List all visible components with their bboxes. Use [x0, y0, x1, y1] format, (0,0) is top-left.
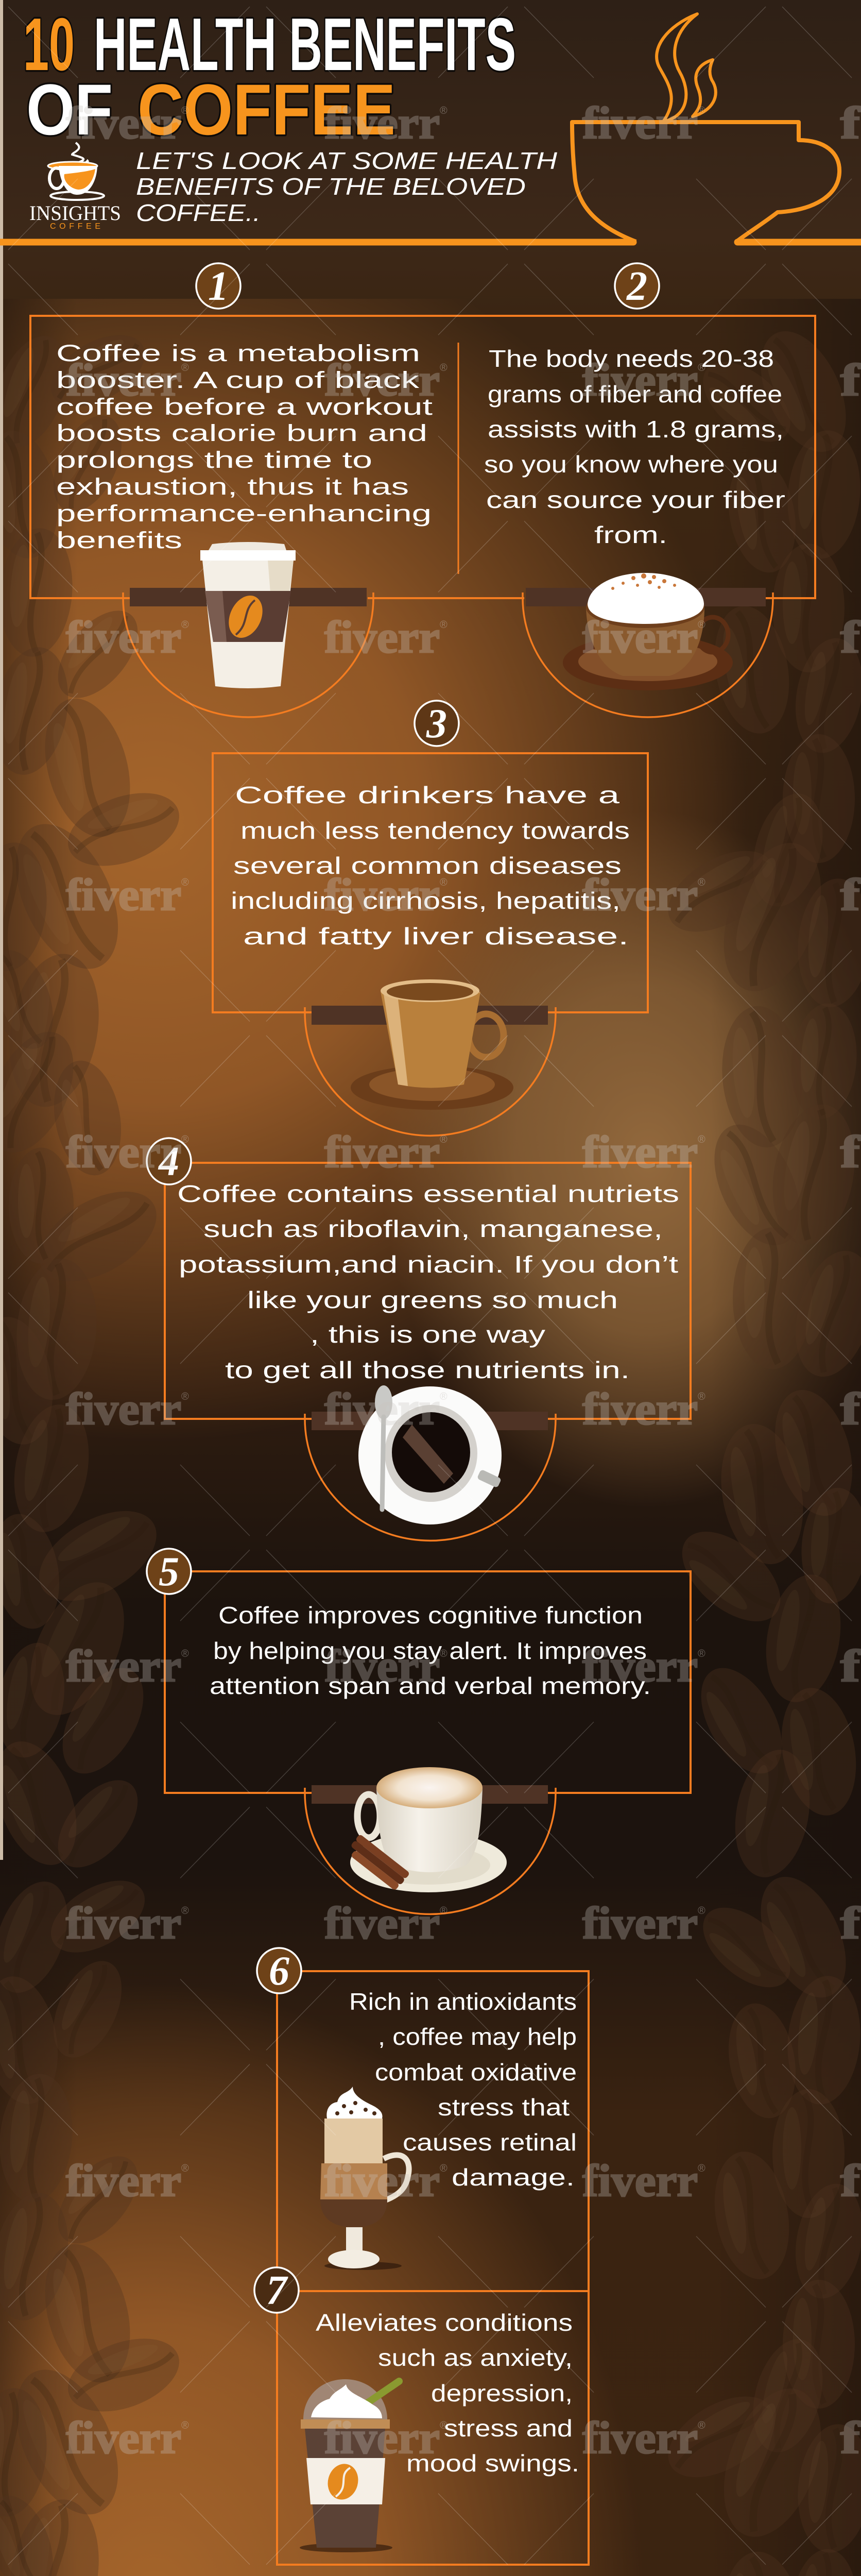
text: benefit 1: coffee before a workout [56, 394, 433, 420]
text: benefit 2: The body needs 20-38 [489, 345, 774, 372]
watermark text: ® [440, 2420, 447, 2431]
text: benefit 7: Alleviates conditions [316, 2309, 573, 2336]
watermark text: ® [181, 1648, 189, 1659]
logo: insights coffee: COFFEE [50, 222, 100, 231]
watermark text: f [840, 1899, 861, 1948]
watermark text: ® [698, 1648, 705, 1659]
logo: insights coffee: INSIGHTS [29, 201, 121, 225]
watermark text: fiverr [582, 1127, 698, 1177]
watermark text: fiverr [324, 1127, 440, 1177]
text: benefit 6: damage. [452, 2164, 575, 2191]
panel frame [165, 1571, 691, 1793]
title line 2: COFFEE [137, 69, 395, 150]
number badge 1: 1 [208, 264, 229, 309]
watermark text: f [840, 1641, 861, 1691]
watermark text: ® [698, 105, 705, 116]
text: benefit 4: , this is one way [310, 1321, 545, 1348]
bowl arc [305, 1788, 556, 1914]
watermark text: f [840, 1384, 861, 1434]
panel: benefit 4 [147, 1138, 691, 1540]
text: benefit 3 [231, 782, 630, 950]
text: benefit 2: grams of fiber and coffee [488, 381, 782, 408]
text: benefit 2: can source your fiber [486, 486, 785, 513]
watermark text: fiverr [582, 2413, 698, 2463]
subtitle [136, 147, 558, 226]
text: benefit 6: Rich in antioxidants [349, 1988, 577, 2015]
number badge 7 [254, 2267, 299, 2313]
band 2 [526, 588, 766, 606]
panel frame [277, 1971, 589, 2291]
watermark text: ® [698, 1391, 705, 1402]
logo: insights coffee [29, 143, 121, 231]
watermark text: ® [181, 362, 189, 374]
panel: benefit 6 [257, 1948, 589, 2291]
number badge 7: 7 [266, 2268, 288, 2313]
bowl arc 1 [123, 592, 373, 717]
watermark text: ® [440, 619, 447, 631]
text: benefit 1: boosts calorie burn and [56, 420, 427, 446]
watermark text: ® [440, 1648, 447, 1659]
watermark text: fiverr [66, 355, 181, 405]
icon: foam cup with cinnamon [346, 1767, 507, 1892]
text: benefit 7: such as anxiety, [378, 2344, 573, 2371]
watermark text: ® [181, 877, 189, 888]
watermark text: ® [698, 1905, 705, 1917]
number badge 3 [415, 701, 459, 747]
text: benefit 1: exhaustion, thus it has [56, 473, 409, 500]
text: benefit 1: Coffee is a metabolism [56, 340, 420, 366]
band [312, 1006, 548, 1025]
watermark text: fiverr [66, 2413, 181, 2463]
number badge 6 [257, 1948, 301, 1994]
watermark text: ® [698, 2420, 705, 2431]
watermark text: fiverr [324, 1384, 440, 1434]
watermark text: ® [181, 619, 189, 631]
text: benefit 7: depression, [431, 2380, 573, 2406]
watermark text: fiverr [66, 870, 181, 920]
watermark text: ® [698, 877, 705, 888]
watermark text: f [840, 1127, 861, 1177]
watermark text: fiverr [66, 1641, 181, 1691]
watermark text: fiverr [66, 2156, 181, 2206]
watermark text: fiverr [582, 1641, 698, 1691]
text: benefit 1 [56, 340, 433, 553]
watermark text: f [840, 2413, 861, 2463]
watermark text: ® [181, 105, 189, 116]
watermark text: ® [440, 1905, 447, 1917]
watermark text: fiverr [66, 1899, 181, 1948]
text: benefit 3: Coffee drinkers have a [235, 782, 620, 808]
text: benefit 7: stress and [444, 2415, 573, 2442]
bowl arc [305, 1414, 556, 1540]
icon: top-view coffee [358, 1385, 502, 1524]
text: benefit 5 [210, 1602, 651, 1699]
text: benefit 3: and fatty liver disease. [243, 923, 629, 950]
watermark text: f [840, 870, 861, 920]
panel frame [277, 2291, 589, 2565]
subtitle: BENEFITS OF THE BELOVED [136, 173, 526, 200]
number badge 3: 3 [426, 701, 447, 747]
watermark text: fiverr [66, 1127, 181, 1177]
watermark text: f [840, 98, 861, 148]
text: benefit 2: assists with 1.8 grams, [488, 416, 784, 443]
watermark text: fiverr [324, 2156, 440, 2206]
number badge 2 [615, 263, 659, 309]
header [0, 3, 861, 242]
watermark text: fiverr [66, 613, 181, 663]
text: benefit 6 [349, 1988, 577, 2191]
title line 2: OF [26, 69, 113, 150]
watermark text: ® [698, 1134, 705, 1145]
band [312, 1785, 548, 1804]
text: benefit 4: to get all those nutrients in. [225, 1357, 630, 1383]
icon: iced coffee cup [300, 2379, 399, 2552]
title line 1: HEALTH BENEFITS [94, 3, 516, 86]
icon: takeaway cup [200, 542, 296, 688]
panel frame [213, 753, 648, 1012]
watermark text: fiverr [324, 355, 440, 405]
text: benefit 3: including cirrhosis, hepatitis, [231, 887, 621, 914]
text: benefit 2: so you know where you [484, 451, 778, 478]
watermark text: ® [440, 1134, 447, 1145]
text: benefit 3: several common diseases [233, 852, 622, 879]
panel frame [165, 1163, 691, 1419]
text: benefit 2 [484, 345, 785, 548]
watermark text: ® [440, 1391, 447, 1402]
number badge 4 [147, 1138, 191, 1184]
watermark text: ® [181, 2420, 189, 2431]
number badge 5 [147, 1549, 191, 1595]
watermark text: fiverr [324, 870, 440, 920]
watermark text: fiverr [582, 98, 698, 148]
watermark text: fiverr [582, 355, 698, 405]
text: benefit 4: such as riboflavin, manganese, [203, 1215, 663, 1242]
watermark text: ® [181, 1391, 189, 1402]
text: benefit 4: potassium,and niacin. If you don’t [179, 1251, 678, 1278]
text: benefit 5: Coffee improves cognitive function [218, 1602, 643, 1629]
watermark text: ® [181, 2163, 189, 2174]
panel: benefit 5 [147, 1549, 691, 1914]
watermark text: fiverr [324, 1899, 440, 1948]
text: benefit 5: attention span and verbal memory. [210, 1672, 651, 1699]
text: benefit 3: much less tendency towards [240, 817, 630, 844]
panel: benefit 3 [213, 701, 648, 1136]
subtitle: LET'S LOOK AT SOME HEALTH [136, 147, 558, 174]
header rule [0, 239, 861, 245]
number badge 2: 2 [626, 264, 647, 309]
band [312, 1412, 548, 1430]
panel: benefit 7 [254, 2267, 589, 2565]
watermark text: fiverr [324, 2413, 440, 2463]
watermark text: ® [440, 2163, 447, 2174]
number badge 5: 5 [159, 1549, 179, 1595]
text: benefit 4 [177, 1180, 679, 1383]
icon: cappuccino [563, 573, 733, 690]
watermark text: fiverr [582, 1384, 698, 1434]
title line 1 [23, 3, 516, 86]
watermark text: ® [698, 362, 705, 374]
divider [457, 343, 459, 574]
bowl arc [305, 1007, 556, 1136]
text: benefit 2: from. [594, 521, 667, 548]
watermark text: fiverr [582, 870, 698, 920]
text: benefit 6: combat oxidative [375, 2059, 577, 2086]
text: benefit 5: by helping you stay alert. It improves [213, 1637, 647, 1664]
number badge 1 [196, 263, 240, 309]
icon: layered latte glass [320, 2087, 409, 2270]
icon: tan mug [351, 979, 513, 1110]
watermark text: ® [698, 619, 705, 631]
watermark text: fiverr [66, 98, 181, 148]
watermark text: f [840, 613, 861, 663]
watermark text: ® [181, 1134, 189, 1145]
text: benefit 6: causes retinal [403, 2129, 577, 2156]
watermark text: ® [440, 362, 447, 374]
bowl arc 2 [523, 592, 773, 717]
watermark text: f [840, 2156, 861, 2206]
panel: benefits 1 and 2 [30, 263, 815, 717]
watermark text: fiverr [582, 2156, 698, 2206]
watermark text: fiverr [324, 613, 440, 663]
watermark text: ® [181, 1905, 189, 1917]
text: benefit 4: Coffee contains essential nutriets [177, 1180, 679, 1207]
watermark text: ® [440, 105, 447, 116]
watermark text: fiverr [582, 613, 698, 663]
watermark text: fiverr [582, 1899, 698, 1948]
text: benefit 1: benefits [56, 527, 182, 553]
icon: cup outline with steam [572, 14, 839, 242]
title line 1: 10 [23, 3, 75, 86]
text: benefit 1: performance-enhancing [56, 500, 432, 527]
watermark text: fiverr [324, 1641, 440, 1691]
text: benefit 6: , coffee may help [378, 2023, 577, 2050]
watermark text: f [840, 355, 861, 405]
number badge 6: 6 [269, 1948, 289, 1994]
watermark text: fiverr [66, 1384, 181, 1434]
number badge 4: 4 [158, 1139, 179, 1184]
watermark text: ® [440, 877, 447, 888]
watermark text: ® [698, 2163, 705, 2174]
watermark text: fiverr [324, 98, 440, 148]
text: benefit 7: mood swings. [406, 2450, 579, 2477]
panel frame [30, 316, 815, 598]
text: benefit 1: prolongs the time to [56, 447, 372, 473]
band 1 [130, 588, 367, 606]
text: benefit 7 [316, 2309, 579, 2477]
subtitle: COFFEE.. [136, 199, 261, 226]
text: benefit 1: booster. A cup of black [56, 367, 420, 393]
title line 2 [26, 69, 395, 150]
text: benefit 4: like your greens so much [247, 1286, 618, 1313]
text: benefit 6: stress that [438, 2094, 570, 2121]
